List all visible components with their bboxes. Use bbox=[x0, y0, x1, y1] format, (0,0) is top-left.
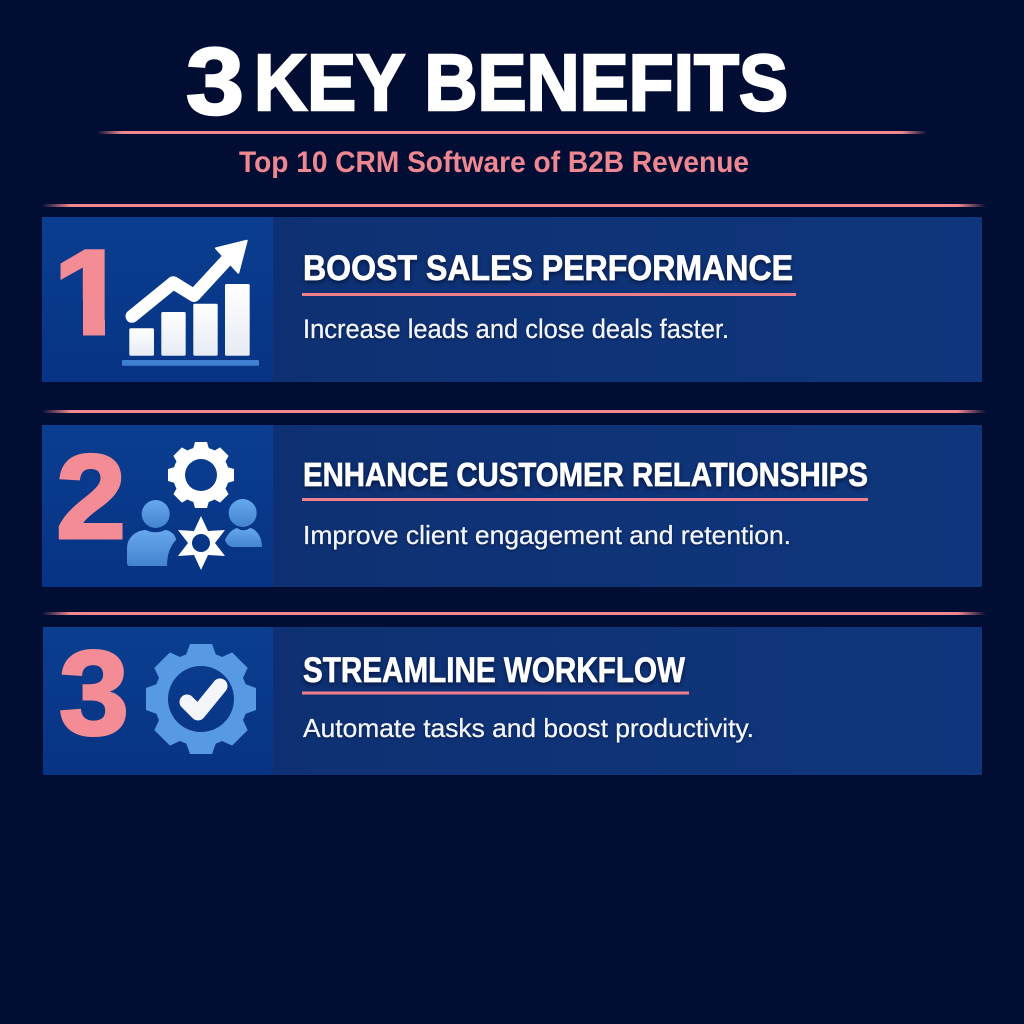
icon: gear with check bbox=[146, 644, 256, 754]
divider 1 bbox=[42, 204, 986, 207]
panel: benefit 2 bbox=[42, 425, 982, 587]
heading 2: ENHANCE CUSTOMER RELATIONSHIPS bbox=[303, 456, 868, 493]
description 3: Automate tasks and boost productivity. bbox=[303, 713, 754, 743]
heading 3: STREAMLINE WORKFLOW bbox=[303, 651, 685, 690]
number 1: 1 bbox=[53, 224, 128, 360]
title: KEY BENEFITS bbox=[254, 38, 788, 127]
panel: benefit 3 bbox=[43, 626, 982, 775]
title bbox=[186, 29, 788, 135]
icon: rising bar chart bbox=[122, 241, 259, 366]
title: 3 bbox=[186, 29, 244, 135]
heading underline 2 bbox=[302, 498, 868, 501]
icon: team with gears bbox=[127, 442, 262, 570]
title rule bbox=[97, 131, 927, 134]
panel: benefit 1 bbox=[42, 217, 982, 382]
description 1: Increase leads and close deals faster. bbox=[303, 314, 729, 344]
heading 1: BOOST SALES PERFORMANCE bbox=[303, 249, 793, 288]
heading underline 3 bbox=[302, 692, 689, 694]
divider 2 bbox=[42, 410, 986, 413]
divider 3 bbox=[42, 612, 986, 615]
number 2: 2 bbox=[56, 430, 126, 564]
subtitle: Top 10 CRM Software of B2B Revenue bbox=[239, 146, 749, 179]
heading underline 1 bbox=[302, 293, 796, 296]
number 3: 3 bbox=[59, 626, 129, 760]
description 2: Improve client engagement and retention. bbox=[303, 520, 791, 550]
